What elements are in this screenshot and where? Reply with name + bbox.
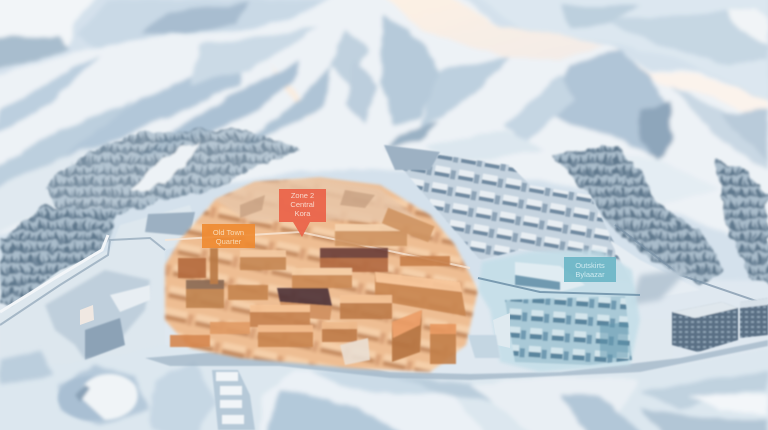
pale foothill xyxy=(0,140,140,240)
forest: upper left slope trees xyxy=(45,130,300,215)
apartment blocks: right side xyxy=(672,298,768,352)
label: outskirts callout xyxy=(564,257,616,282)
label: city centre callout: Zone 2 xyxy=(291,191,314,200)
warm sunlit faces xyxy=(384,0,605,60)
label: city centre callout: Central xyxy=(290,200,315,209)
label: outskirts callout: Outskirts xyxy=(575,261,605,270)
snow field: bottom foreground xyxy=(0,345,768,430)
blue shadow bands: left slopes xyxy=(0,55,100,135)
label: city centre callout xyxy=(279,189,326,237)
label: old town callout: Quarter xyxy=(216,237,242,246)
background: distant mountains xyxy=(0,0,768,280)
label: old town callout: Old Town xyxy=(213,228,244,237)
zone: outskirts blue overlay xyxy=(468,250,640,372)
old town buildings xyxy=(170,208,466,365)
forest: lower left slope trees xyxy=(0,205,120,305)
outskirts: grey town blocks xyxy=(0,145,768,375)
dome: snow-covered hill xyxy=(58,374,138,420)
label: city centre callout: Kora xyxy=(295,209,311,218)
forest: right slope trees xyxy=(550,145,768,285)
buildings: bottom chalets xyxy=(212,370,255,430)
zone: old town orange overlay xyxy=(165,178,478,372)
label: old town callout xyxy=(202,224,255,248)
label: outskirts callout: Bylaazar xyxy=(575,270,605,279)
treeline: along the lower road xyxy=(145,340,768,380)
mountain range: main snow slopes xyxy=(0,0,768,260)
blue shadow bands: right slopes xyxy=(380,15,440,125)
